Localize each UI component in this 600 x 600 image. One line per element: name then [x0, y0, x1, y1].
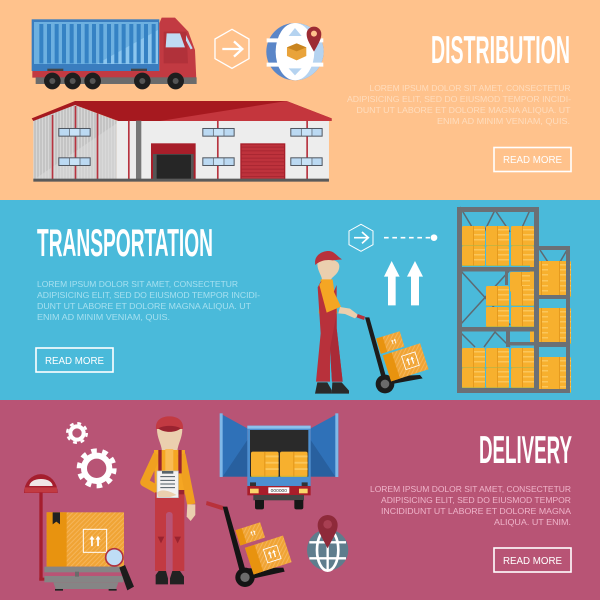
icon: gears	[67, 423, 114, 486]
distribution body text: LOREM IPSUM DOLOR SIT AMET, CONSECTETUR	[370, 83, 570, 93]
warehouse	[32, 101, 332, 182]
transportation body text: LOREM IPSUM DOLOR SIT AMET, CONSECTETUR	[37, 279, 238, 289]
button: read more: READ MORE	[45, 355, 104, 367]
open truck rear	[220, 413, 338, 509]
transportation body text: ENIM AD MINIM VENIAM, QUIS.	[37, 312, 170, 322]
panel: transportation: TRANSPORTATION	[37, 222, 213, 265]
icon: up arrows	[384, 261, 423, 305]
button: read more: READ MORE	[503, 555, 562, 567]
transportation body text: ADIPISICING ELIT, SED DO EIUSMOD TEMPOR INCIDI-	[37, 290, 260, 300]
delivery body text	[370, 484, 571, 527]
transportation body text: DUNT UT LABORE ET DOLORE MAGNA ALIQUA. UT	[37, 301, 251, 311]
scale with parcel	[24, 474, 134, 591]
transportation background	[0, 200, 600, 400]
button: read more	[36, 348, 113, 372]
distribution body text: DUNT UT LABORE ET DOLORE MAGNA ALIQUA. UT	[356, 105, 570, 115]
panel: distribution	[0, 0, 600, 200]
distribution background	[0, 0, 600, 200]
delivery body text: LOREM IPSUM DOLOR SIT AMET, CONSECTETUR	[370, 484, 571, 494]
button: read more: READ MORE	[503, 154, 562, 166]
button: read more	[494, 548, 571, 572]
icon: hexagon arrow	[215, 29, 249, 68]
warehouse shelving	[457, 207, 571, 393]
panel: transportation	[0, 200, 600, 400]
distribution body text: ADIPISICING ELIT, SED DO EIUSMOD TEMPOR INCIDI-	[347, 94, 571, 104]
worker with hand truck	[315, 251, 429, 394]
delivery body text: INCIDIDUNT UT LABORE ET DOLORE MAGNA	[381, 506, 571, 516]
panel: delivery	[0, 400, 600, 600]
button: read more	[494, 148, 571, 172]
open truck rear: 000000	[271, 488, 287, 493]
hand truck with boxes	[206, 501, 292, 587]
delivery body text: ALIQUA. UT ENIM.	[494, 517, 571, 527]
truck	[32, 18, 197, 89]
transportation body text	[37, 279, 260, 322]
distribution body text	[347, 83, 571, 126]
delivery background	[0, 400, 600, 600]
icon: globe with box and pin	[266, 23, 324, 80]
delivery body text: ADIPISICING ELIT, SED DO EIUSMOD TEMPOR	[381, 495, 571, 505]
delivery worker	[144, 416, 195, 584]
icon: hexagon arrow and dashed line	[349, 224, 437, 251]
icon: globe and pin	[307, 515, 348, 571]
distribution body text: ENIM AD MINIM VENIAM, QUIS.	[437, 116, 570, 126]
